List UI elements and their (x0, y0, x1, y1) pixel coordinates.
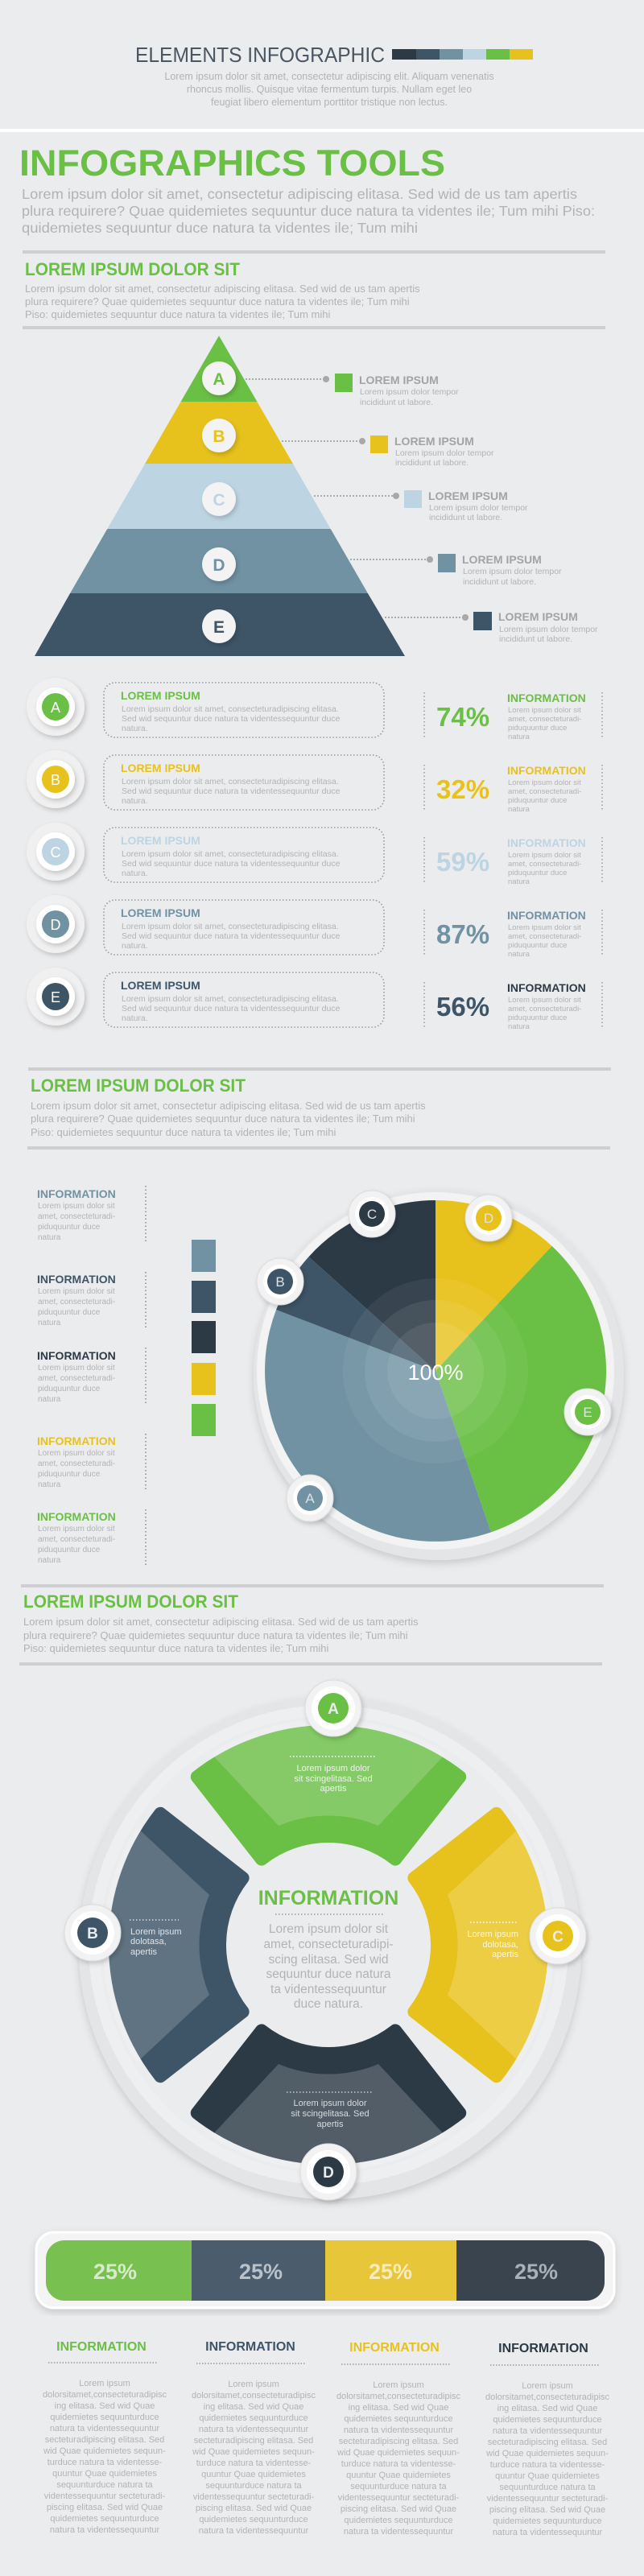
bottom info columns: dolorsitamet,consecteturadipisc (43, 2390, 167, 2400)
bottom info columns: ing elitasa. Sed wid Quae (55, 2401, 155, 2411)
bottom info columns: sequunturduce natura ta (350, 2482, 448, 2491)
pie markers: B (275, 1274, 285, 1290)
bottom info columns: videntessequuntur secteturadi- (487, 2494, 609, 2504)
center text: amet, consecteturadipi- (263, 1938, 394, 1951)
pie chart (254, 1190, 624, 1560)
section 1 heading: LOREM IPSUM DOLOR SIT (25, 259, 241, 279)
percentage bar: 25% (514, 2260, 558, 2284)
segment texts: apertis (492, 1950, 518, 1959)
bottom info columns: INFORMATION (498, 2342, 588, 2355)
bottom info columns: videntessequuntur secteturadi- (193, 2492, 315, 2502)
row D: amet, consecteturadi- (508, 932, 581, 941)
pyramid labels: LOREM IPSUM (394, 435, 474, 448)
pie legend info: INFORMATION (37, 1349, 116, 1362)
row B: piduquuntur duce (508, 796, 567, 805)
header title (135, 43, 533, 67)
segment texts: Lorem ipsum dolor (296, 1764, 370, 1773)
row A: Lorem ipsum dolor sit (508, 706, 581, 715)
bottom info columns: secteturadipiscing elitasa. Sed (194, 2436, 313, 2446)
pie legend info: natura (38, 1556, 61, 1565)
pie markers: A (305, 1491, 315, 1506)
row D: piduquuntur duce (508, 941, 567, 950)
segment B slate (115, 1814, 243, 2076)
bottom info columns: quidemietes sequunturduce (344, 2414, 453, 2424)
header title: ELEMENTS INFOGRAPHIC (135, 43, 385, 67)
segment texts: sit scingelitasa. Sed (294, 1774, 373, 1784)
bottom info columns: natura ta videntessequuntur (50, 2525, 160, 2535)
segment texts: sit scingelitasa. Sed (291, 2109, 369, 2119)
bottom info columns: quidemietes sequunturduce (50, 2413, 159, 2422)
pyramid labels: Lorem ipsum dolor tempor (429, 503, 528, 513)
pie legend info: Lorem ipsum dolor sit (38, 1525, 115, 1534)
pie legend info: natura (38, 1480, 61, 1489)
pyramid chart: A (213, 370, 225, 389)
row B: Lorem ipsum dolor sit (508, 778, 581, 787)
bottom info columns: quidemietes sequunturduce (199, 2413, 308, 2423)
row E: piduquuntur duce (508, 1013, 567, 1022)
row E: E (51, 989, 60, 1005)
segment texts: apertis (320, 1784, 347, 1794)
bottom info columns: quuntur Quae quidemietes (346, 2471, 451, 2480)
bottom info columns: wid Quae quidemietes sequun- (336, 2448, 460, 2458)
row D: Lorem ipsum dolor sit (508, 923, 581, 932)
section 3 text: Piso: quidemietes sequuntur duce natura ta videntes ile; Tum mihi (23, 1642, 328, 1654)
row B: natura (508, 805, 530, 814)
row D: D (50, 917, 61, 933)
bottom info columns: ing elitasa. Sed wid Quae (497, 2404, 597, 2413)
row E: LOREM IPSUM (121, 979, 200, 992)
row list A-E (27, 678, 602, 1031)
row E (27, 968, 602, 1031)
bottom info columns: piscing elitasa. Sed wid Quae (341, 2504, 456, 2514)
bottom info columns: Lorem ipsum (228, 2380, 279, 2389)
bottom info columns: quidemietes sequunturduce (199, 2515, 308, 2524)
section 2 heading: LOREM IPSUM DOLOR SIT (31, 1075, 246, 1096)
bottom info columns: piscing elitasa. Sed wid Quae (489, 2505, 605, 2515)
pyramid labels: LOREM IPSUM (428, 489, 508, 502)
bottom info columns: turduce natura ta videntesse- (47, 2458, 163, 2467)
bottom info columns: secteturadipiscing elitasa. Sed (45, 2435, 164, 2445)
bottom info columns: wid Quae quidemietes sequun- (192, 2447, 315, 2457)
bottom info columns: natura ta videntessequuntur (493, 2528, 603, 2537)
section 1 text (25, 283, 420, 320)
bottom info columns: turduce natura ta videntesse- (341, 2459, 456, 2469)
center text: sequuntur duce natura (266, 1967, 391, 1981)
ring markers: B (87, 1926, 98, 1942)
pie legend info: piduquuntur duce (38, 1385, 101, 1393)
pie legend info: piduquuntur duce (38, 1308, 101, 1317)
bottom info columns: quidemietes sequunturduce (50, 2514, 159, 2524)
bottom info columns: natura ta videntessequuntur (344, 2425, 454, 2435)
row E: 56% (436, 992, 489, 1022)
row B: LOREM IPSUM (121, 762, 200, 774)
section 2 text: Lorem ipsum dolor sit amet, consectetur adipiscing elitasa. Sed wid de us tam apertis (31, 1100, 426, 1112)
row E: natura. (122, 1013, 148, 1023)
center text: INFORMATION (258, 1887, 398, 1909)
bottom info columns: videntessequuntur secteturadi- (44, 2491, 166, 2501)
pie legend swatches (192, 1240, 216, 1436)
bottom info columns: videntessequuntur secteturadi- (338, 2493, 460, 2503)
pyramid labels: LOREM IPSUM (498, 610, 578, 623)
bottom info columns: turduce natura ta videntesse- (196, 2458, 312, 2468)
bottom info columns: Lorem ipsum (522, 2381, 573, 2391)
segment texts: apertis (130, 1947, 158, 1957)
percentage bar: 25% (239, 2260, 283, 2284)
row E: natura (508, 1022, 530, 1031)
row C: Lorem ipsum dolor sit (508, 851, 581, 860)
row C: C (50, 844, 61, 861)
segment D dark (197, 2030, 460, 2158)
bottom info columns: natura ta videntessequuntur (199, 2425, 309, 2434)
section 3 heading: LOREM IPSUM DOLOR SIT (23, 1591, 239, 1612)
segment texts: Lorem ipsum (467, 1930, 518, 1939)
segment C yellow (414, 1814, 542, 2076)
row B: natura. (122, 796, 148, 806)
bottom info columns: piscing elitasa. Sed wid Quae (196, 2504, 312, 2513)
pie legend info: Lorem ipsum dolor sit (38, 1202, 115, 1211)
row E: INFORMATION (507, 981, 586, 994)
bottom info columns: natura ta videntessequuntur (344, 2527, 454, 2537)
bottom info columns: quidemietes sequunturduce (344, 2516, 453, 2525)
pyramid labels: LOREM IPSUM (462, 553, 542, 566)
section 3 text: Lorem ipsum dolor sit amet, consectetur adipiscing elitasa. Sed wid de us tam apertis (23, 1616, 419, 1628)
bottom info columns: ing elitasa. Sed wid Quae (349, 2403, 448, 2413)
bottom info columns: sequunturduce natura ta (205, 2481, 303, 2491)
bottom info columns: INFORMATION (56, 2340, 147, 2354)
row D: LOREM IPSUM (121, 906, 200, 919)
bottom info columns: dolorsitamet,consecteturadipisc (192, 2391, 316, 2401)
pie legend info: piduquuntur duce (38, 1470, 101, 1479)
row A: INFORMATION (507, 691, 586, 704)
header subtext: feugiat libero elementum porttitor tristique non lectus. (211, 97, 448, 108)
row B: Lorem ipsum dolor sit amet, consecteturadipiscing elitasa. (122, 777, 339, 786)
row A: Lorem ipsum dolor sit amet, consecteturadipiscing elitasa. (122, 704, 339, 714)
pie legend info: amet, consecteturadi- (38, 1459, 115, 1468)
row C: Sed wid sequuntur duce natura ta videntessequuntur duce (122, 859, 341, 869)
pyramid chart: E (213, 618, 225, 637)
section 1 text: Piso: quidemietes sequuntur duce natura ta videntes ile; Tum mihi (25, 308, 330, 320)
segment texts: Lorem ipsum dolor (293, 2099, 367, 2108)
ring markers: A (328, 1701, 339, 1718)
row B: amet, consecteturadi- (508, 787, 581, 796)
row D: Sed wid sequuntur duce natura ta videntessequuntur duce (122, 931, 341, 941)
header subtext: rhoncus mollis. Quisque vitae fermentum turpis. Nullam eget leo (187, 84, 472, 95)
row D: 87% (436, 919, 489, 949)
row A: Sed wid sequuntur duce natura ta videntessequuntur duce (122, 714, 341, 724)
pie legend info: piduquuntur duce (38, 1223, 101, 1232)
segment texts (130, 1757, 518, 2129)
bottom info columns: quidemietes sequunturduce (493, 2415, 602, 2425)
bottom info columns: natura ta videntessequuntur (199, 2526, 309, 2536)
row A: LOREM IPSUM (121, 689, 200, 702)
pie markers: E (583, 1405, 592, 1420)
pie legend info: INFORMATION (37, 1435, 116, 1447)
row B: Sed wid sequuntur duce natura ta videntessequuntur duce (122, 786, 341, 796)
pie chart: 100% (407, 1360, 464, 1385)
pyramid chart: C (213, 491, 225, 510)
bottom info columns: secteturadipiscing elitasa. Sed (488, 2438, 607, 2447)
bottom info columns: Lorem ipsum (373, 2380, 424, 2390)
pie legend info: Lorem ipsum dolor sit (38, 1449, 115, 1458)
segment texts: dolotasa, (130, 1937, 167, 1946)
pyramid labels: Lorem ipsum dolor tempor (360, 387, 459, 397)
pie legend info: Lorem ipsum dolor sit (38, 1364, 115, 1373)
section 2 text (31, 1100, 426, 1138)
pyramid labels: LOREM IPSUM (359, 374, 439, 386)
bottom info columns (43, 2340, 610, 2537)
row C: 59% (436, 847, 489, 877)
ring diagram (64, 1680, 586, 2200)
bottom info columns: INFORMATION (205, 2340, 295, 2354)
segment A green (197, 1732, 460, 1860)
bottom info columns: ing elitasa. Sed wid Quae (204, 2402, 303, 2412)
pie markers: D (484, 1211, 493, 1226)
pie legend info: natura (38, 1395, 61, 1404)
pyramid labels: Lorem ipsum dolor tempor (463, 567, 562, 576)
bottom info columns: sequunturduce natura ta (499, 2483, 597, 2492)
section 2 text: plura requirere? Quae quidemietes sequuntur duce natura ta videntes ile; Tum mihi (31, 1113, 415, 1125)
main title: INFOGRAPHICS TOOLS (19, 142, 445, 184)
section 2 text: Piso: quidemietes sequuntur duce natura ta videntes ile; Tum mihi (31, 1126, 336, 1138)
row C: piduquuntur duce (508, 869, 567, 877)
segment texts: dolotasa, (482, 1940, 518, 1950)
bottom info columns: natura ta videntessequuntur (50, 2424, 160, 2434)
bottom info columns: quidemietes sequunturduce (493, 2516, 602, 2526)
row B: 32% (436, 774, 489, 804)
percentage bar: 25% (93, 2260, 137, 2284)
header subtext (164, 71, 494, 108)
ring markers: C (552, 1929, 564, 1946)
percentage bar (36, 2232, 614, 2308)
section 1 text: plura requirere? Quae quidemietes sequuntur duce natura ta videntes ile; Tum mihi (25, 295, 410, 308)
pyramid labels: incididunt ut labore. (499, 634, 572, 644)
pie legend info: piduquuntur duce (38, 1546, 101, 1554)
pie legend info (37, 1186, 146, 1565)
row E: Sed wid sequuntur duce natura ta videntessequuntur duce (122, 1004, 341, 1013)
percentage bar: 25% (369, 2260, 412, 2284)
bottom info columns: quuntur Quae quidemietes (201, 2470, 306, 2479)
row E: amet, consecteturadi- (508, 1005, 581, 1013)
bottom info columns: INFORMATION (349, 2341, 440, 2355)
pie legend info: natura (38, 1233, 61, 1242)
row A: A (51, 700, 60, 716)
row E: Lorem ipsum dolor sit (508, 996, 581, 1005)
header subtext: Lorem ipsum dolor sit amet, consectetur adipiscing elit. Aliquam venenatis (164, 71, 494, 82)
row A: natura. (122, 724, 148, 733)
pie legend info: INFORMATION (37, 1510, 116, 1523)
pyramid labels: incididunt ut labore. (395, 458, 469, 468)
pyramid labels (246, 374, 598, 644)
row A: natura (508, 733, 530, 741)
row D (27, 895, 602, 959)
center text: ta videntessequuntur (270, 1983, 386, 1996)
bottom info columns: quuntur Quae quidemietes (52, 2469, 157, 2479)
pyramid labels: Lorem ipsum dolor tempor (499, 625, 598, 634)
pyramid chart: B (213, 427, 225, 446)
pie markers: C (367, 1207, 377, 1222)
pie legend info: amet, consecteturadi- (38, 1212, 115, 1221)
pie markers (257, 1191, 611, 1521)
row A: amet, consecteturadi- (508, 715, 581, 724)
row D: INFORMATION (507, 909, 586, 922)
pie legend info: amet, consecteturadi- (38, 1535, 115, 1544)
center text: scing elitasa. Sed wid (268, 1953, 389, 1967)
bottom info columns: piscing elitasa. Sed wid Quae (47, 2503, 163, 2512)
row C: natura. (122, 869, 148, 878)
center text: duce natura. (294, 1997, 363, 2011)
bottom info columns: quuntur Quae quidemietes (495, 2471, 600, 2481)
section 1 text: Lorem ipsum dolor sit amet, consectetur adipiscing elitasa. Sed wid de us tam apertis (25, 283, 420, 295)
segment texts: Lorem ipsum (130, 1927, 182, 1937)
row D: Lorem ipsum dolor sit amet, consecteturadipiscing elitasa. (122, 922, 339, 931)
pyramid labels: Lorem ipsum dolor tempor (395, 448, 494, 458)
pyramid chart (35, 336, 405, 656)
row A (27, 678, 602, 741)
pie legend info: INFORMATION (37, 1187, 116, 1200)
pyramid chart: D (213, 556, 225, 575)
row D: natura. (122, 941, 148, 951)
pie legend info: natura (38, 1319, 61, 1327)
bottom info columns: secteturadipiscing elitasa. Sed (339, 2437, 458, 2446)
row C: natura (508, 877, 530, 886)
row C: LOREM IPSUM (121, 834, 200, 847)
bottom info columns: Lorem ipsum (79, 2379, 130, 2388)
row A: 74% (436, 702, 489, 732)
intro paragraph: Lorem ipsum dolor sit amet, consectetur adipiscing elitasa. Sed wid de us tam apertis (22, 186, 577, 202)
row C: INFORMATION (507, 836, 586, 849)
bottom info columns: natura ta videntessequuntur (493, 2426, 603, 2436)
bottom info columns: dolorsitamet,consecteturadipisc (336, 2392, 461, 2401)
pie legend info: INFORMATION (37, 1273, 116, 1286)
row C: amet, consecteturadi- (508, 860, 581, 869)
bottom info columns: sequunturduce natura ta (56, 2480, 154, 2490)
intro paragraph: plura requirere? Quae quidemietes sequuntur duce natura ta videntes ile; Tum mihi Piso: (22, 203, 595, 219)
pyramid labels: incididunt ut labore. (360, 398, 433, 407)
segment texts: apertis (316, 2120, 344, 2129)
pyramid labels: incididunt ut labore. (463, 577, 536, 587)
bottom info columns: dolorsitamet,consecteturadipisc (485, 2392, 610, 2402)
row B: INFORMATION (507, 764, 586, 777)
pie legend info: amet, consecteturadi- (38, 1298, 115, 1307)
row C (27, 823, 602, 886)
bottom info columns: wid Quae quidemietes sequun- (43, 2446, 166, 2456)
intro paragraph: quidemietes sequuntur duce natura ta videntes ile; Tum mihi (22, 220, 418, 236)
ring markers (64, 1680, 586, 2200)
pyramid labels: incididunt ut labore. (429, 513, 502, 522)
row E: Lorem ipsum dolor sit amet, consecteturadipiscing elitasa. (122, 994, 339, 1004)
row B: B (51, 772, 60, 788)
intro paragraph (22, 186, 595, 236)
row B (27, 750, 602, 814)
row D: natura (508, 950, 530, 959)
bottom info columns: turduce natura ta videntesse- (490, 2460, 605, 2470)
ring markers: D (323, 2165, 334, 2182)
pie legend info: Lorem ipsum dolor sit (38, 1287, 115, 1296)
row A: piduquuntur duce (508, 724, 567, 733)
center text (258, 1887, 398, 2011)
center text: Lorem ipsum dolor sit (269, 1922, 389, 1936)
row C: Lorem ipsum dolor sit amet, consecteturadipiscing elitasa. (122, 849, 339, 859)
bottom info columns: wid Quae quidemietes sequun- (485, 2449, 609, 2458)
section 3 text (23, 1616, 419, 1654)
section 3 text: plura requirere? Quae quidemietes sequuntur duce natura ta videntes ile; Tum mihi (23, 1629, 408, 1641)
pie legend info: amet, consecteturadi- (38, 1374, 115, 1383)
